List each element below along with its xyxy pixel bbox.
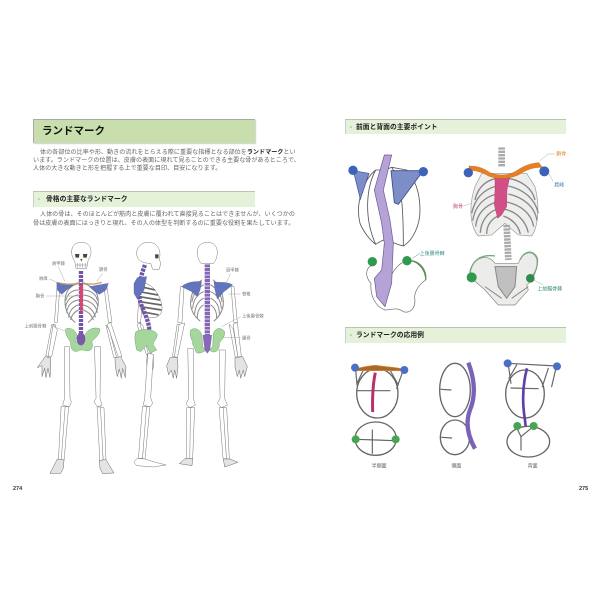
front rib cage — [65, 283, 98, 322]
schematic spine — [374, 155, 393, 307]
anatomical iliac arcs — [470, 252, 537, 277]
back sacrum — [203, 335, 212, 354]
back rib cage — [191, 280, 223, 321]
heading: front and back key points: 前面と背面の主要ポイント — [356, 124, 438, 131]
front scapulae — [57, 282, 108, 294]
side cross marks — [441, 389, 452, 438]
side spine stroke — [468, 363, 475, 449]
side rib cage — [138, 282, 162, 318]
back labels: 脊椎 — [242, 291, 251, 298]
half-side shoulders — [356, 369, 403, 412]
chart: side skeleton — [134, 242, 166, 467]
back landmarks — [504, 359, 561, 430]
half-side landmarks — [351, 364, 408, 443]
anatomical sternum — [494, 176, 510, 218]
half-side sternum stroke — [373, 373, 375, 412]
heading: landmark application examples: ランドマークの応用例 — [356, 332, 424, 339]
half-side clavicle bar — [356, 365, 404, 371]
page number left: 274 — [13, 486, 22, 492]
side leg and arm bones — [134, 278, 166, 467]
front sacrum — [77, 333, 85, 345]
front sternum — [79, 285, 83, 313]
anatomical pelvis — [470, 253, 537, 305]
chart: front skeleton — [25, 242, 126, 474]
side scapula — [134, 277, 147, 299]
front labels — [25, 261, 108, 331]
back pelvis — [507, 426, 550, 457]
anatomical cervical and lumbar spine — [502, 147, 508, 260]
schematic rib cage outline — [359, 167, 420, 246]
anatomical clavicle — [469, 163, 542, 178]
back labels: 肩甲棘 — [226, 268, 240, 274]
back scapulae — [182, 282, 233, 299]
back torso ellipse — [506, 370, 544, 418]
front arm and leg bones — [37, 285, 126, 474]
half-side caption: 半側面 — [372, 462, 387, 469]
anatomical labels: 上前腸骨棘 — [537, 285, 562, 292]
heading: landmark application examples — [345, 327, 566, 343]
half-side torso ellipse — [357, 369, 398, 418]
side skull — [137, 242, 161, 269]
front labels: 鎖骨 — [99, 266, 108, 273]
schematic landmark dots — [348, 166, 428, 266]
sketch: half-side view — [351, 364, 408, 469]
back arm and leg bones — [167, 287, 247, 467]
back spine — [199, 264, 215, 345]
anatomical labels: 肩峰 — [554, 182, 564, 189]
panel: front and back schematic diagram — [348, 147, 566, 312]
back labels: 腸骨 — [242, 335, 251, 341]
back shoulders and bar — [508, 363, 557, 389]
side pelvis — [135, 329, 157, 353]
front skull — [72, 242, 91, 268]
front clavicles — [60, 282, 102, 284]
sketch: back view — [504, 359, 561, 469]
front labels: 胸骨 — [36, 292, 44, 299]
anatomical landmark dots — [464, 166, 549, 283]
side torso ellipse — [440, 363, 470, 417]
schematic scapula right — [391, 171, 423, 204]
front labels: 肩峰 — [39, 275, 48, 282]
text block: skeleton description: 骨は皮膚の表面にはっきりと現れ、その人の体型を判断するのに重要な役割を果たしています。 — [33, 220, 294, 226]
label: posterior superior iliac spine: 上後腸骨棘 — [420, 250, 445, 257]
anatomical labels — [453, 150, 566, 292]
side caption: 側面 — [451, 462, 461, 469]
heading: major skeletal landmarks — [33, 191, 255, 207]
back labels — [222, 268, 264, 341]
text block: skeleton description: 人体の骨は、そのほとんどが筋肉と皮膚に覆われて直接見ることはできませんが、いくつかの — [40, 211, 295, 218]
back caption: 背面 — [528, 462, 538, 469]
back labels: 上後腸骨棘 — [242, 313, 264, 320]
page number right: 275 — [579, 486, 588, 492]
text block: introduction: います。ランドマークの位置は、皮膚の表面に現れて見ることのできる主要な骨があるところで、 — [33, 157, 300, 164]
heading: front and back key points — [345, 119, 566, 134]
half-side pelvis cross — [356, 430, 395, 453]
back spine stroke — [523, 368, 527, 427]
anatomical labels: 鎖骨 — [556, 150, 566, 157]
back pelvis — [190, 328, 225, 353]
sketch: side view — [440, 363, 475, 469]
schematic scapula left — [353, 171, 369, 199]
schematic green arc — [411, 261, 426, 280]
panel: title banner — [33, 119, 255, 143]
back skull — [197, 242, 217, 264]
front pelvis — [66, 328, 100, 351]
anatomical labels: 胸骨 — [453, 203, 463, 210]
side spine — [139, 265, 149, 330]
label: posterior superior iliac spine — [412, 250, 445, 258]
anatomical pelvis shading — [485, 267, 528, 298]
schematic pelvis outline — [367, 261, 426, 312]
front spine — [74, 271, 87, 345]
front labels: 肩甲棘 — [52, 261, 66, 267]
heading: major skeletal landmarks: 骨格の主要なランドマーク — [46, 196, 128, 203]
side ribs — [139, 287, 161, 315]
text block: introduction: 体の各部位の比率や形、動きの流れをとらえる際に重要な指標となる部位をランドマークとい — [40, 149, 296, 156]
half-side pelvis — [355, 422, 396, 455]
side pelvis ellipse — [440, 420, 470, 455]
title: ランドマーク — [42, 125, 105, 137]
text block: introduction — [33, 148, 300, 172]
text block: introduction: 人体の大きな動きと形を把握する上で重要な目印、目安になります。 — [33, 164, 221, 172]
front labels: 上前腸骨棘 — [25, 322, 47, 329]
back pelvis centre marks — [517, 427, 532, 450]
text block: skeleton description — [33, 210, 295, 226]
anatomical rib cage — [471, 173, 538, 236]
chart: back skeleton — [167, 242, 264, 467]
